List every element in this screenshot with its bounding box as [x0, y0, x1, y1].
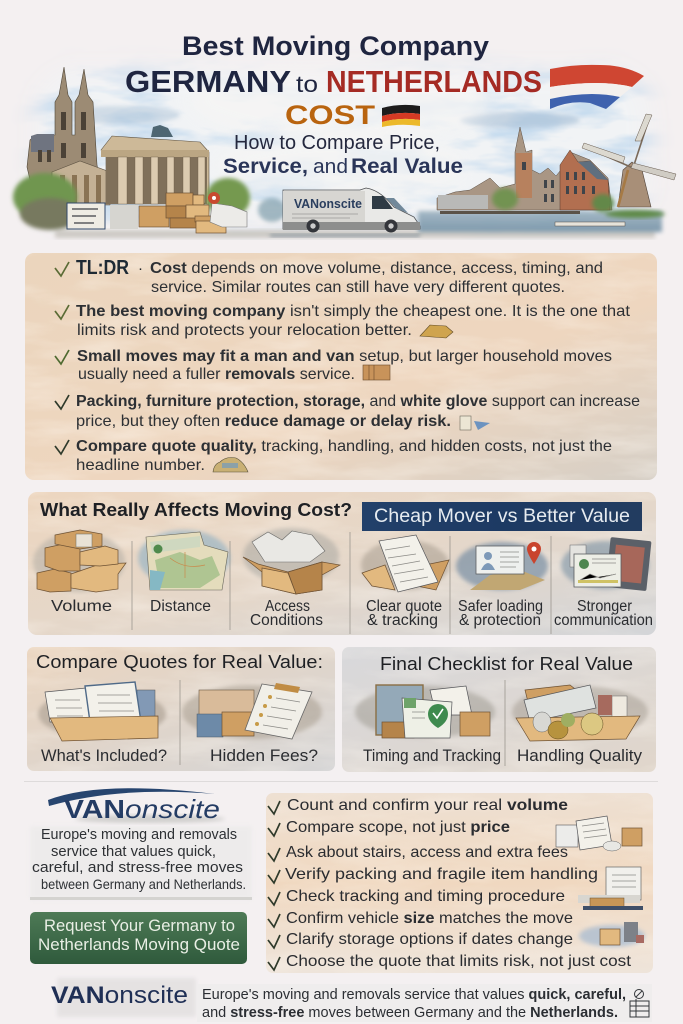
- text block: packing: price, but they often reduce damage or delay risk.: [76, 413, 451, 430]
- icon: small car: [213, 458, 248, 472]
- footer logo: VANonscite: [51, 982, 188, 1009]
- text block: company intro: Europe's moving and removals: [41, 826, 237, 843]
- footer logo: [51, 978, 196, 1017]
- labels: cost factors: Distance: [150, 598, 211, 615]
- text block: compare quote quality: headline number.: [76, 457, 205, 474]
- text block: company intro: [30, 826, 252, 900]
- icon: clear quote document: [361, 535, 449, 592]
- text block: TL:DR cost: Cost depends on move volume, distance, access, timing, and: [150, 260, 603, 277]
- trees: [13, 173, 286, 230]
- cathedral: [27, 67, 110, 205]
- text block: TL:DR cost: ·: [138, 260, 143, 277]
- text block: packing: [55, 393, 640, 430]
- checklist items: Count and confirm your real volume: [287, 797, 568, 814]
- icon: storage boxes: [579, 922, 645, 947]
- banner: cheap mover vs better value: Cheap Mover vs Better Value: [374, 506, 630, 527]
- labels: compare quotes: Hidden Fees?: [210, 747, 318, 765]
- labels: compare quotes: [41, 747, 318, 765]
- labels: better value: Safer loading: [458, 598, 543, 615]
- text block: company intro: service that values quick,: [51, 843, 216, 860]
- icon: stronger communication screens: [561, 537, 651, 591]
- title: COST: [285, 100, 376, 130]
- checklist items: Choose the quote that limits risk, not just cost: [286, 953, 632, 970]
- icon: cardboard box: [363, 365, 390, 380]
- text block: best moving company: [55, 303, 631, 339]
- title: [125, 31, 542, 130]
- checklist items: Clarify storage options if dates change: [286, 931, 573, 948]
- labels: better value: & tracking: [367, 612, 438, 629]
- checklist items: Compare scope, not just price: [286, 819, 510, 836]
- icon: clipboard and crate: [578, 867, 643, 910]
- title: NETHERLANDS: [326, 64, 542, 99]
- windmill: [582, 114, 676, 207]
- checklist items: Confirm vehicle size matches the move: [286, 910, 573, 927]
- subtitle: and: [313, 156, 348, 178]
- street sign: [67, 203, 138, 229]
- title: to: [296, 71, 318, 97]
- logo: VANonscite: [48, 788, 225, 824]
- labels: cost factors: Conditions: [250, 612, 323, 629]
- ground strip: [55, 230, 655, 238]
- text block: best moving company: The best moving company isn't simply the cheapest one. It is the one that: [76, 303, 631, 320]
- button: request a quote: [30, 912, 247, 964]
- labels: better value: & protection: [459, 612, 541, 629]
- text block: compare quote quality: Compare quote quality, tracking, handling, and hidden costs, not just the: [76, 438, 612, 455]
- panel: checklist: [266, 793, 653, 973]
- subtitle: Real Value: [351, 155, 463, 178]
- title: Best Moving Company: [182, 31, 489, 61]
- subtitle: Service,: [223, 155, 308, 178]
- heading: what affects cost: What Really Affects Moving Cost?: [40, 499, 352, 520]
- title: GERMANY: [125, 64, 291, 99]
- text block: company intro: careful, and stress-free moves: [32, 859, 243, 876]
- labels: compare quotes: What's Included?: [41, 747, 167, 765]
- labels: cost factors: [51, 598, 323, 629]
- heading: final checklist: Final Checklist for Real Value: [380, 654, 633, 674]
- footer text: and stress-free moves between Germany and the Netherlands.: [202, 1004, 618, 1021]
- sky with watercolor clouds: [27, 62, 659, 230]
- button: request a quote: Request Your Germany to: [44, 916, 235, 935]
- Dutch town: [437, 127, 665, 226]
- delivery van: [283, 188, 420, 232]
- text block: company intro: between Germany and Netherlands.: [41, 876, 246, 892]
- icon: safer loading card and pin: [456, 542, 548, 590]
- icon: Netherlands flag: [550, 65, 644, 109]
- icon: access conditions box: [243, 528, 340, 594]
- Brandenburg gate: [101, 125, 209, 204]
- text block: small moves: [55, 348, 612, 383]
- icon: footer moving stack: [630, 990, 649, 1017]
- text block: compare quote quality: [55, 438, 612, 474]
- delivery van: VANonscite: [294, 196, 362, 211]
- checklist items: Ask about stairs, access and extra fees: [286, 844, 568, 861]
- text block: TL:DR cost: service. Similar routes can still have very different quotes.: [151, 279, 565, 296]
- text block: small moves: usually need a fuller removals service.: [78, 366, 355, 383]
- text block: best moving company: limits risk and protects your relocation better.: [77, 322, 412, 339]
- checklist items: [268, 797, 632, 970]
- text block: packing: Packing, furniture protection, storage, and white glove support can increase: [76, 393, 640, 410]
- checklist items: Check tracking and timing procedure: [286, 888, 565, 905]
- icon: distance map: [138, 530, 230, 590]
- labels: final checklist: Timing and Tracking: [363, 747, 501, 765]
- text block: small moves: Small moves may fit a man and van setup, but larger household moves: [77, 348, 612, 365]
- footer text: Europe's moving and removals service that values quick, careful,: [202, 986, 626, 1003]
- labels: cost factors: Volume: [51, 598, 112, 615]
- banner: cheap mover vs better value: [362, 502, 642, 531]
- labels: final checklist: [363, 747, 643, 765]
- subtitle: How to Compare Price,: [234, 132, 440, 154]
- labels: better value: Clear quote: [366, 598, 442, 615]
- icon: documents and box: [556, 816, 642, 851]
- panel: final checklist: [342, 647, 656, 772]
- labels: cost factors: Access: [265, 598, 310, 615]
- labels: better value: [366, 598, 653, 629]
- icon: volume boxes: [33, 530, 126, 592]
- heading: compare quotes: Compare Quotes for Real Value:: [36, 652, 323, 672]
- icon: timing and tracking documents: [355, 685, 495, 738]
- logo: VANonscite: VAN onscite: [64, 794, 220, 824]
- icon: what's included folder box: [38, 682, 166, 741]
- water: [418, 211, 662, 232]
- subtitle: [223, 132, 463, 178]
- button: request a quote: Netherlands Moving Quote: [38, 935, 240, 954]
- icon: gold box: [420, 325, 453, 338]
- panel: cost factors and value comparison: [28, 492, 656, 635]
- text block: TL:DR cost: TL:DR: [76, 257, 129, 279]
- labels: better value: communication: [554, 612, 653, 629]
- icon: handling quality packed items: [512, 685, 648, 741]
- labels: final checklist: Handling Quality: [517, 747, 643, 765]
- moving boxes and car: [139, 192, 247, 233]
- panel: compare quotes: [27, 647, 335, 771]
- panel: TL;DR key points: [25, 253, 657, 480]
- icon: protection supplies: [460, 416, 490, 430]
- icon: hidden fees clipboard: [182, 683, 322, 739]
- icon: Germany flag: [382, 105, 420, 127]
- labels: better value: Stronger: [577, 598, 632, 615]
- panel: header illustration: [10, 62, 676, 240]
- text block: TL:DR cost: [55, 257, 603, 296]
- checklist items: Verify packing and fragile item handling: [285, 866, 598, 883]
- footer text: [197, 984, 652, 1022]
